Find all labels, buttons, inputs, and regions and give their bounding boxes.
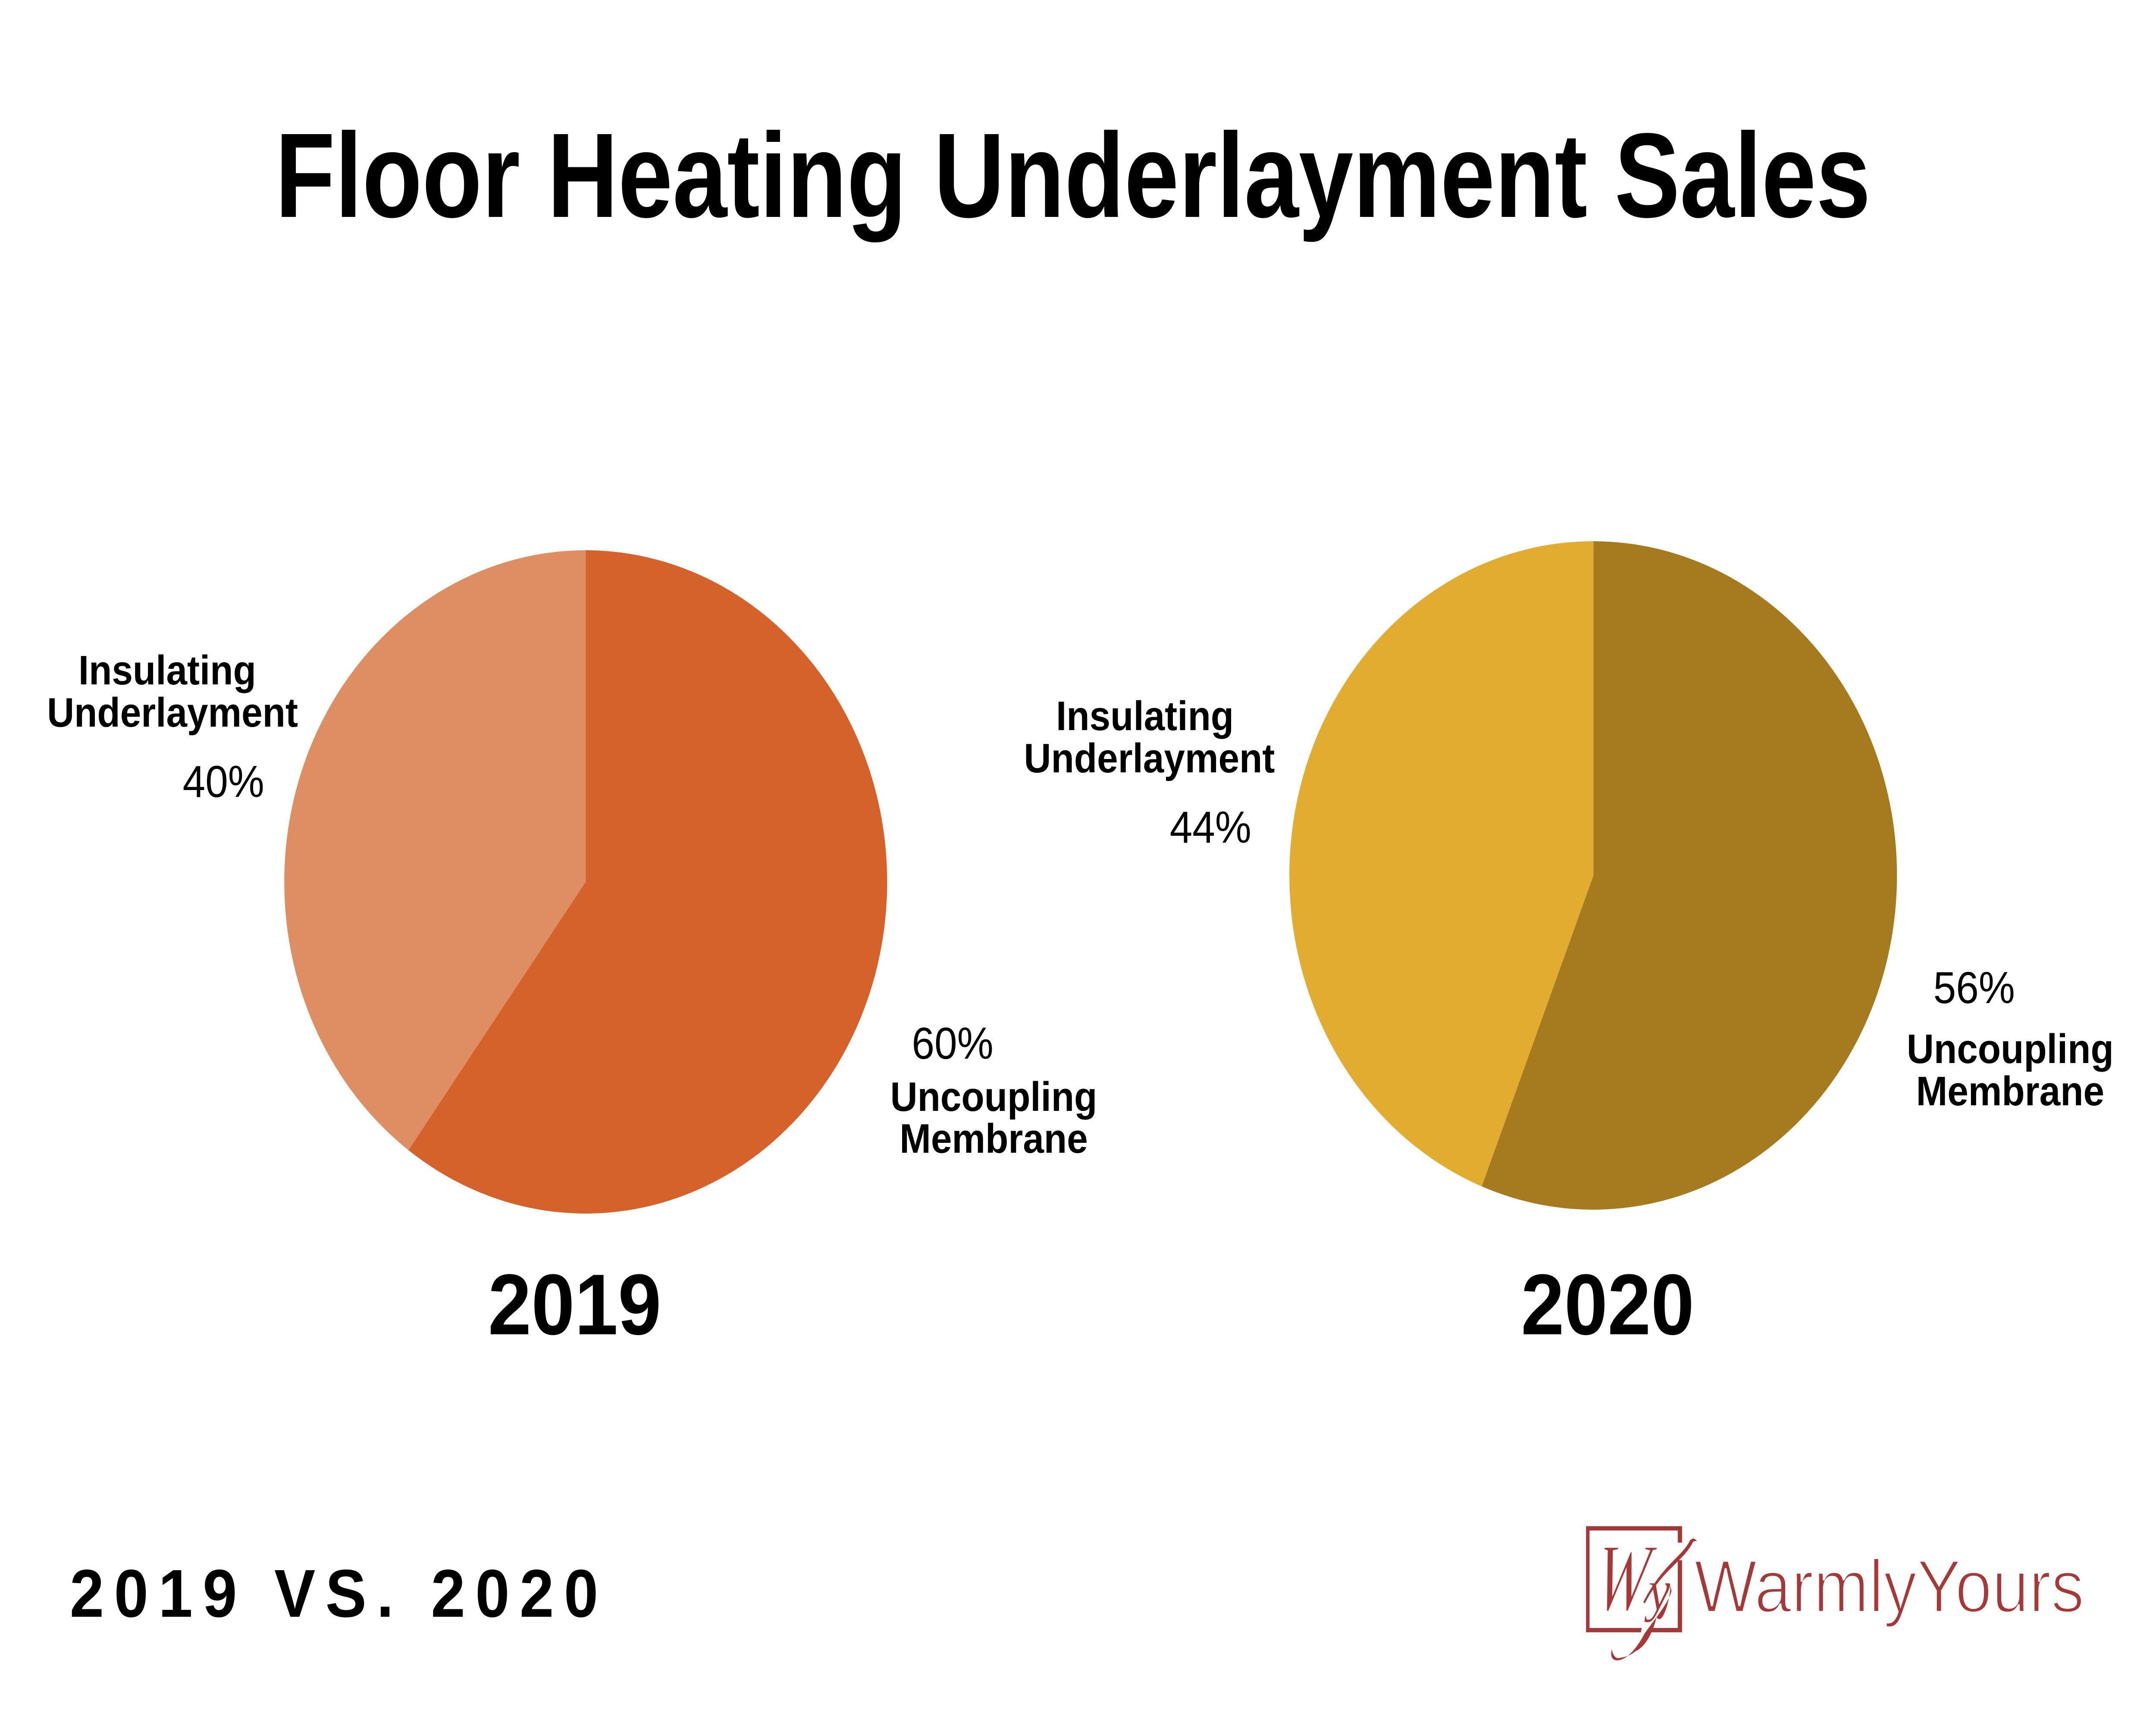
logo frame — [1586, 1526, 1682, 1632]
logo: WarmlyYours — [1586, 1525, 2084, 1660]
label: 2020 Uncoupling Membrane — [1907, 963, 2114, 1114]
label: 2020 Insulating Underlayment: 44% — [1170, 803, 1251, 853]
footer caption: 2019 VS. 2020 — [70, 1556, 598, 1631]
slice: Uncoupling Membrane 56% — [1482, 541, 1897, 1210]
label: 2019 Insulating Underlayment: 40% — [183, 757, 264, 807]
year label: 2020: 2020 — [1521, 1256, 1694, 1353]
slice: Insulating Underlayment 44% — [1289, 541, 1593, 1186]
logo frame gaps — [1641, 1543, 1684, 1634]
label: 2020 Insulating Underlayment — [1024, 693, 1275, 853]
label: 2020 Insulating Underlayment: Insulating — [1056, 693, 1234, 739]
label: 2019 Uncoupling Membrane: Uncoupling — [890, 1074, 1097, 1120]
monogram y: y — [1644, 1558, 1670, 1622]
label: 2019 Uncoupling Membrane — [890, 1019, 1097, 1162]
label: 2019 Uncoupling Membrane: 60% — [912, 1019, 993, 1069]
year label: 2019: 2019 — [488, 1256, 661, 1353]
monogram swash — [1611, 1539, 1697, 1660]
pie chart: 2020 — [1289, 541, 1897, 1210]
monogram W: W — [1591, 1525, 1660, 1631]
label: 2020 Uncoupling Membrane: Uncoupling — [1907, 1026, 2114, 1072]
label: 2019 Uncoupling Membrane: Membrane — [899, 1116, 1088, 1162]
label: 2019 Insulating Underlayment: Insulating — [78, 647, 256, 693]
slice: Uncoupling Membrane 60% — [408, 550, 887, 1214]
title: Floor Heating Underlayment Sales — [275, 109, 1871, 243]
logo wordmark: WarmlyYours — [1694, 1545, 2084, 1628]
slice: Insulating Underlayment 40% — [284, 550, 586, 1150]
label: 2020 Uncoupling Membrane: 56% — [1934, 963, 2015, 1013]
label: 2020 Insulating Underlayment: Underlayment — [1024, 735, 1275, 781]
pie chart: 2019 — [284, 550, 887, 1214]
label: 2019 Insulating Underlayment — [47, 647, 298, 807]
label: 2020 Uncoupling Membrane: Membrane — [1916, 1068, 2104, 1114]
label: 2019 Insulating Underlayment: Underlayment — [47, 690, 298, 736]
